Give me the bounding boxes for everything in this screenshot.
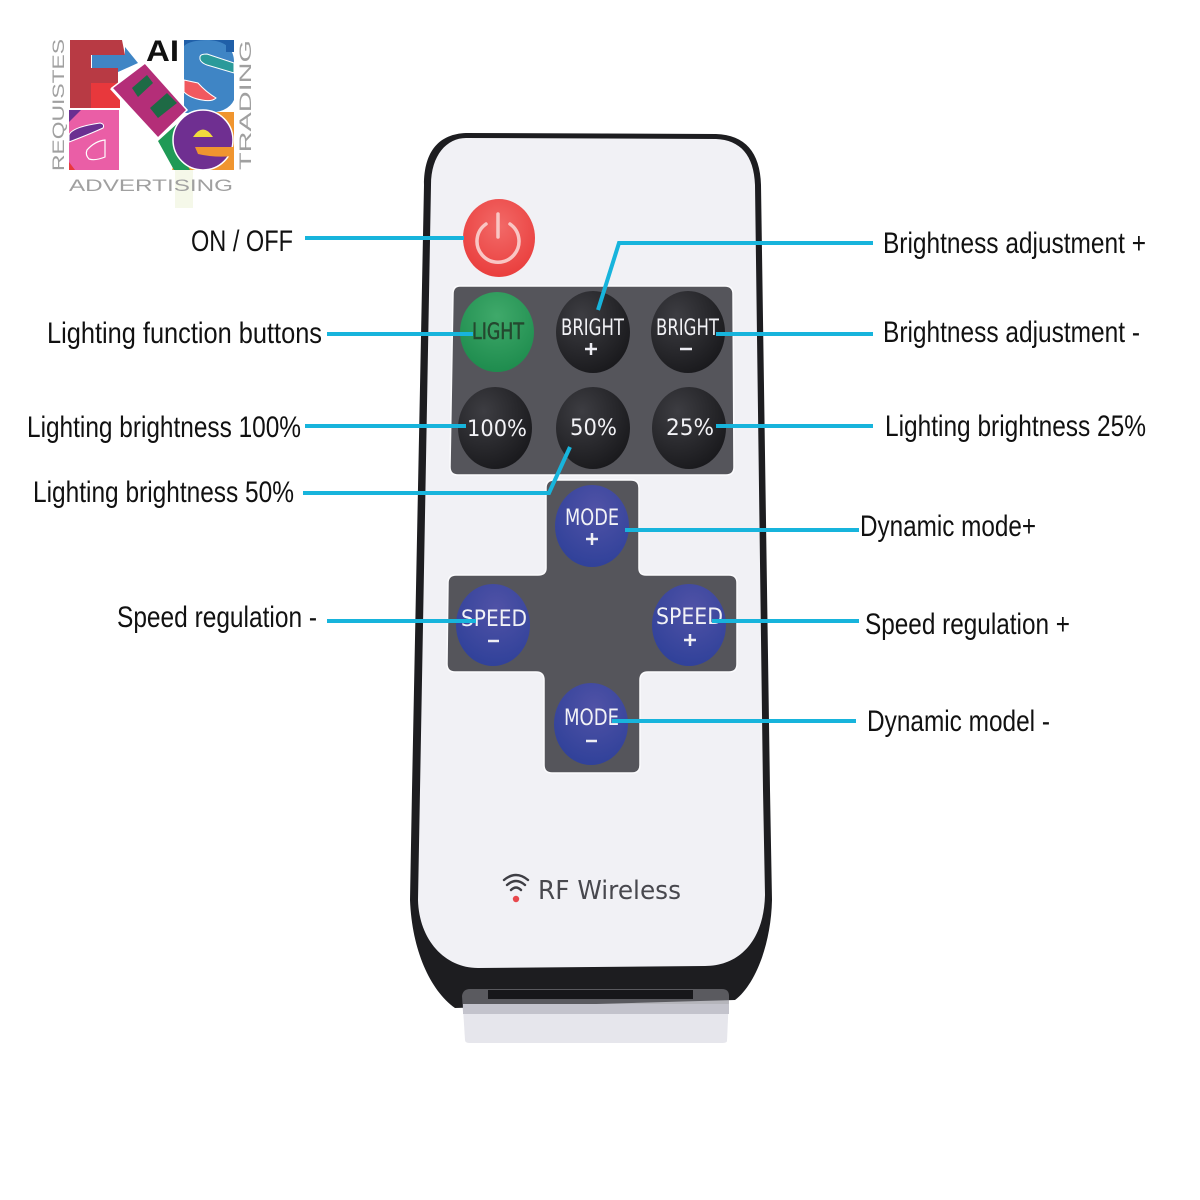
button: BRIGHT + (556, 291, 630, 373)
logo AI: AI (146, 35, 179, 68)
button: SPEED -: SPEED (461, 607, 527, 632)
button: MODE -: MODE (564, 706, 619, 731)
button: 100% (458, 387, 532, 469)
button: SPEED - (456, 584, 530, 666)
button: LIGHT: LIGHT (472, 320, 524, 345)
button: SPEED +: SPEED (656, 605, 723, 630)
button: BRIGHT - (651, 291, 725, 373)
button: SPEED + (652, 584, 726, 666)
logo REQUISTES: REQUISTES (49, 39, 68, 171)
button: 50% (556, 387, 630, 469)
clear tab behind remote (462, 990, 729, 1043)
button: MODE + (555, 485, 629, 567)
remote body (410, 133, 772, 1008)
callout: Lighting brightness 50%: Lighting brightness 50% (33, 476, 294, 509)
logo TRADING: TRADING (236, 40, 255, 170)
callout: Lighting function buttons: Lighting function buttons (47, 317, 322, 350)
button: 50%: 50% (570, 416, 617, 441)
RF Wireless mark (504, 875, 681, 906)
button: BRIGHT -: BRIGHT (656, 316, 719, 341)
callout: Brightness adjustment +: Brightness adjustment + (883, 227, 1146, 260)
button: LIGHT (460, 292, 534, 372)
logo letter e (158, 110, 234, 170)
icon: power (477, 214, 519, 262)
logo ADVERTISING: ADVERTISING (69, 176, 233, 195)
callout: Lighting brightness 100%: Lighting brightness 100% (27, 411, 301, 444)
remote face (418, 138, 765, 968)
panel: lighting buttons (450, 286, 734, 475)
logo letter a (69, 110, 119, 170)
logo (49, 35, 255, 208)
callout: Brightness adjustment -: Brightness adjustment - (883, 316, 1140, 349)
callout: Lighting brightness 25%: Lighting brightness 25% (885, 410, 1146, 443)
power button (463, 199, 535, 277)
button: 25% (652, 387, 726, 469)
callout: Brightness adjustment + (598, 227, 1146, 310)
logo letter E (112, 63, 187, 138)
button: BRIGHT +: BRIGHT (561, 316, 624, 341)
callout: ON / OFF: ON / OFF (191, 225, 293, 258)
callout: Dynamic model -: Dynamic model - (867, 705, 1050, 738)
clear tab over remote (462, 989, 729, 1014)
callout: Speed regulation -: Speed regulation - (117, 601, 317, 634)
icon: wifi signal (504, 875, 528, 902)
logo letter S (184, 40, 234, 113)
panel: mode and speed cross (447, 480, 737, 773)
button: MODE +: MODE (565, 506, 619, 531)
callout: Dynamic mode+: Dynamic mode+ (860, 510, 1036, 543)
callout: Lighting brightness 50% (33, 447, 570, 509)
button: 25%: 25% (666, 416, 714, 441)
RF Wireless text: RF Wireless (538, 876, 681, 906)
button: 100%: 100% (467, 417, 527, 442)
logo letter F (70, 40, 138, 108)
callout: Speed regulation +: Speed regulation + (865, 608, 1070, 641)
button: MODE - (554, 683, 628, 765)
